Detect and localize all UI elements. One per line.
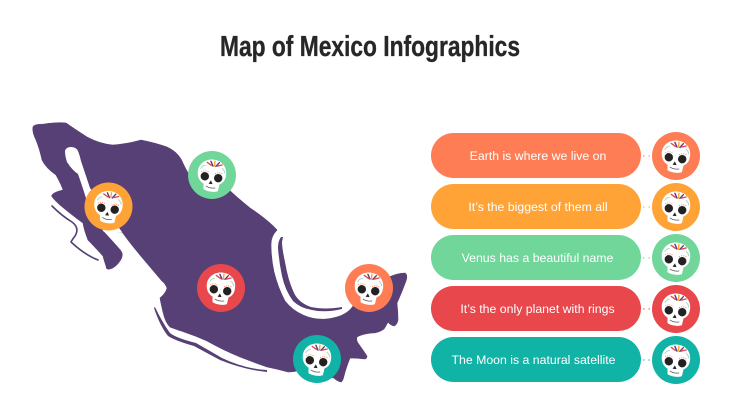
legend row 5: The Moon is a natural satellite (451, 353, 616, 367)
sliver along Gulf coast (278, 237, 342, 311)
map of Mexico (33, 123, 407, 382)
legend row 4: It’s the only planet with rings (460, 302, 615, 316)
map marker: orange skull (84, 182, 132, 230)
sliver off Baja coast (52, 206, 98, 260)
map marker: coral skull (345, 264, 393, 312)
legend row 3: Venus has a beautiful name (462, 251, 614, 265)
legend row 2 (431, 183, 700, 231)
legend row 5 (431, 336, 700, 384)
map marker: teal skull (293, 335, 341, 383)
map marker: green skull (188, 151, 236, 199)
legend row 1: Earth is where we live on (470, 149, 607, 163)
legend row 4 (431, 285, 700, 333)
map marker: red skull (197, 264, 245, 312)
legend row 1 (431, 132, 700, 180)
mainland and Baja California (33, 123, 407, 382)
sliver along Pacific coast (154, 307, 267, 372)
legend row 3 (431, 234, 700, 282)
Gulf of California (65, 147, 122, 232)
title: Map of Mexico Infographics (220, 31, 520, 63)
legend row 2: It’s the biggest of them all (468, 200, 608, 214)
